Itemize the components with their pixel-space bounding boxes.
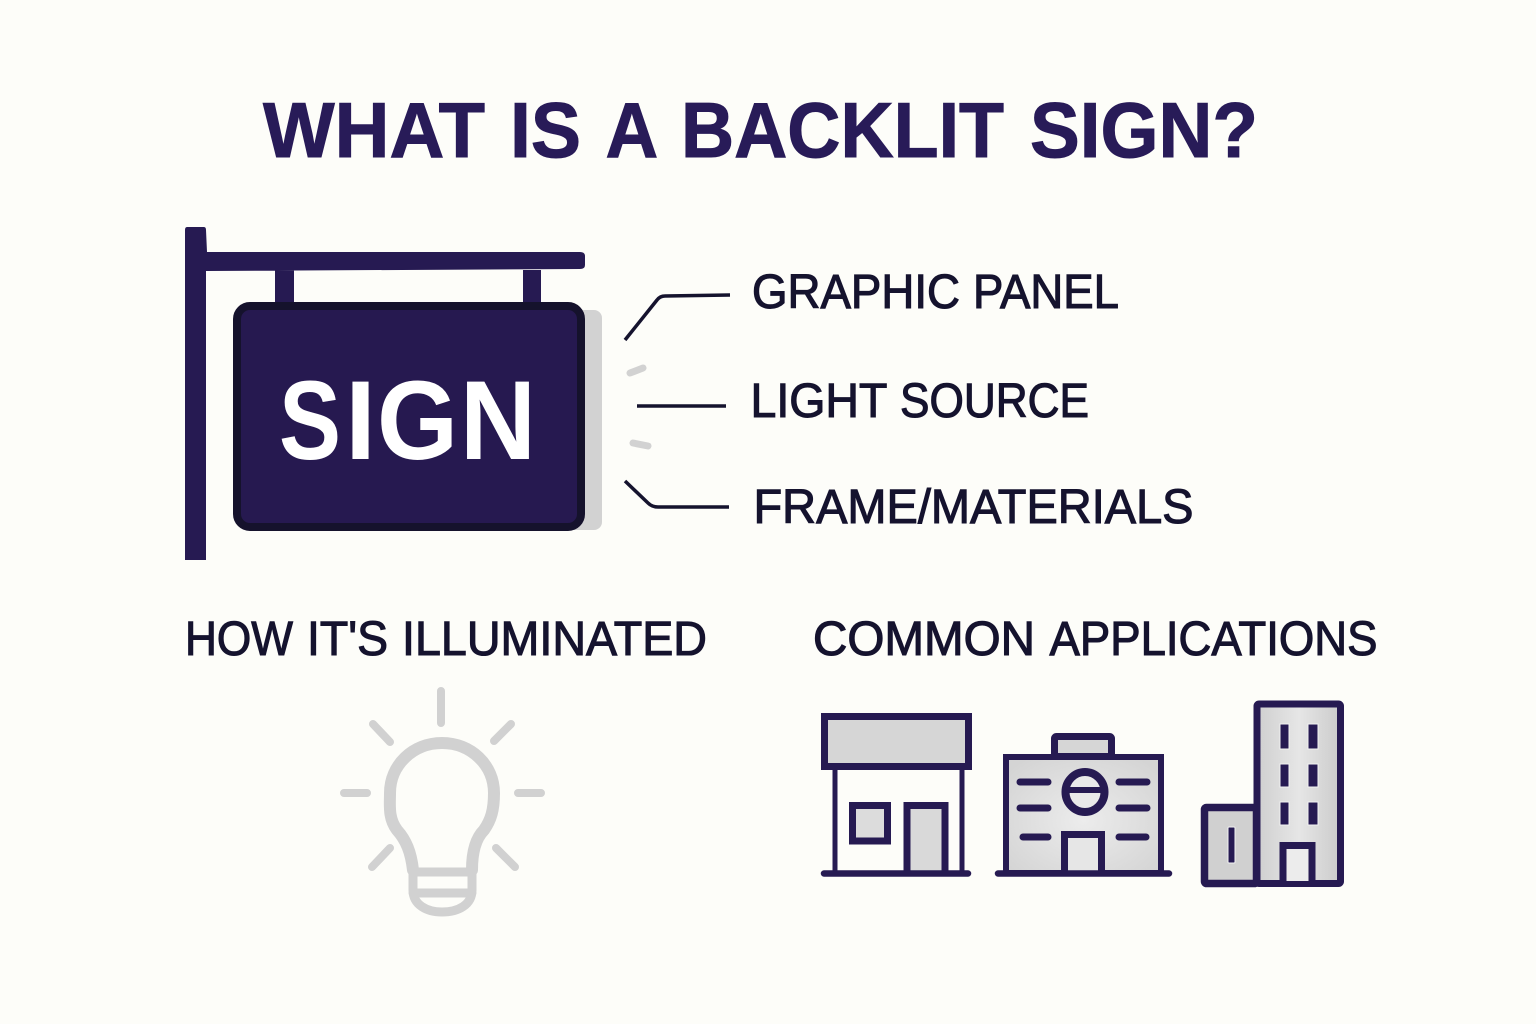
sign board (237, 306, 581, 527)
shop door (907, 806, 945, 873)
sign post and hanging arm (185, 227, 585, 560)
base (998, 870, 1169, 877)
heading: how it's illuminated: IT'S (307, 613, 388, 666)
label: frame/materials: FRAME/MATERIALS (754, 481, 1194, 534)
sign illustration (185, 227, 602, 560)
emblem (1066, 772, 1104, 812)
heading: common applications: COMMON (813, 613, 1035, 666)
icon: office building with round emblem (998, 736, 1169, 874)
shop sign band (824, 716, 968, 766)
wing slot (1228, 827, 1235, 863)
icon: storefront (824, 716, 968, 874)
light dash: lower (633, 443, 648, 446)
shop walls (835, 768, 962, 873)
entrance (1064, 834, 1102, 873)
tower windows (1280, 724, 1318, 825)
icon: light bulb (344, 691, 541, 912)
label: light source: LIGHT (750, 375, 887, 428)
label: graphic panel: GRAPHIC (752, 266, 960, 319)
icon: tower block (1204, 704, 1340, 884)
title: A (606, 86, 657, 174)
light dash: upper (630, 368, 643, 373)
roof block (1054, 736, 1112, 756)
sign word: S (279, 358, 341, 483)
leader line: graphic panel (625, 295, 730, 340)
main block (1006, 757, 1161, 873)
tower body (1257, 704, 1340, 884)
leader line: light source (637, 404, 726, 408)
heading: how it's illuminated: HOW (185, 613, 294, 666)
title: IS (510, 86, 581, 174)
leader line: frame/materials (625, 481, 729, 507)
title: SIGN? (1030, 86, 1258, 174)
glow shadow behind sign (560, 310, 602, 530)
sign word: N (460, 358, 536, 483)
sign word: G (377, 358, 458, 483)
heading: common applications: APPLICATIONS (1050, 613, 1378, 666)
window bars (1020, 782, 1147, 837)
heading: how it's illuminated: ILLUMINATED (402, 613, 707, 666)
tower door (1283, 846, 1312, 881)
shop base (824, 870, 968, 877)
low wing (1204, 808, 1256, 884)
title: WHAT (263, 86, 485, 174)
sign word: I (345, 358, 376, 483)
label: graphic panel: PANEL (973, 266, 1119, 319)
title: BACKLIT (681, 86, 1004, 174)
shop window (852, 806, 888, 841)
label: light source: SOURCE (900, 375, 1089, 428)
